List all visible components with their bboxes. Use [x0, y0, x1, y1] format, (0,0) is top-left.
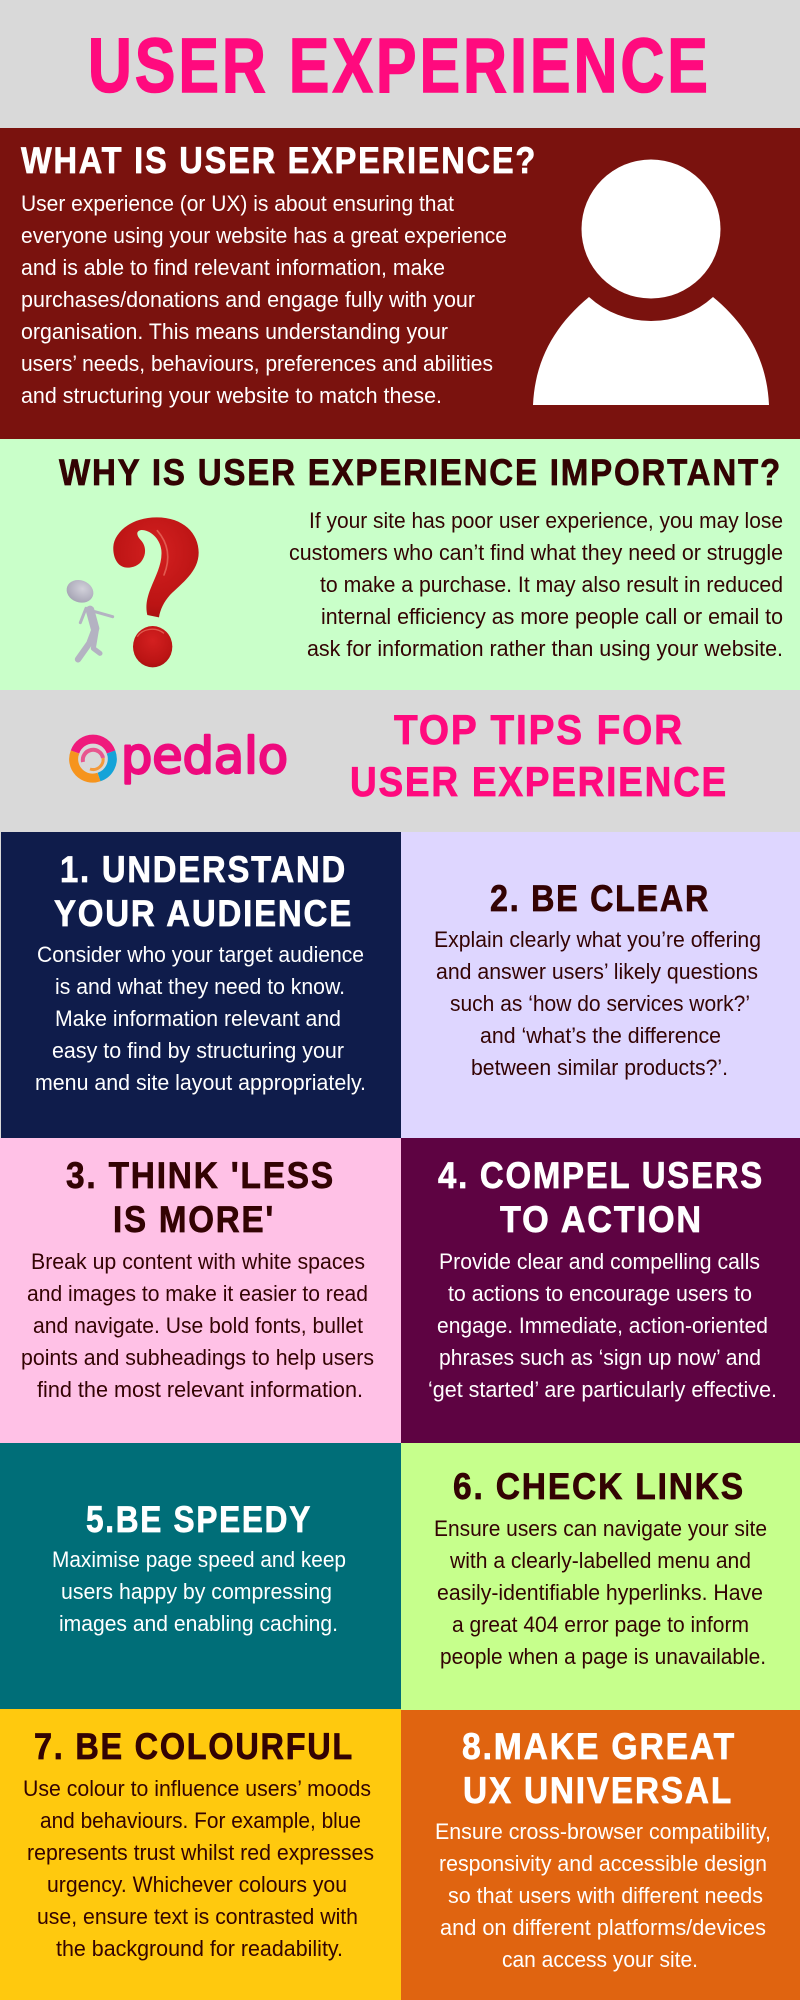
text block: tip 5: users happy by compressing: [61, 1579, 332, 1604]
text block: tip 3: and navigate. Use bold fonts, bullet: [33, 1313, 363, 1338]
text block: definition: purchases/donations and engage fully with your: [21, 287, 475, 312]
panel: tip 2 be clear: [401, 832, 800, 1138]
text block: tip 7: use, ensure text is contrasted with: [37, 1904, 358, 1929]
text block: tip 6: with a clearly-labelled menu and: [449, 1548, 751, 1573]
text block: why it matters: customers who can’t find what they need or struggle: [289, 540, 783, 565]
text block: tip 1: menu and site layout appropriately.: [35, 1070, 366, 1095]
heading: tip 3: 3. THINK 'LESS: [66, 1155, 335, 1196]
text block: tip 2: and answer users’ likely questions: [436, 959, 758, 984]
text block: tip 4: to actions to encourage users to: [448, 1281, 752, 1306]
panel: tip 6 check links: [401, 1443, 800, 1710]
heading: tip 2: 2. BE CLEAR: [490, 878, 710, 919]
text block: tip 4: phrases such as ‘sign up now’ and: [439, 1345, 761, 1370]
text block: tip 8: [435, 1819, 771, 1972]
text block: tip 2: between similar products?’.: [471, 1055, 728, 1080]
text block: tip 8: so that users with different needs: [448, 1883, 763, 1908]
heading: tip 3: IS MORE': [113, 1199, 275, 1240]
heading: tip 8: 8.MAKE GREAT: [462, 1726, 736, 1767]
text block: tip 8: responsivity and accessible design: [439, 1851, 767, 1876]
heading: top tips for user experience: USER EXPERIENCE: [350, 758, 728, 805]
text block: why it matters: [289, 508, 783, 661]
text block: definition: and is able to find relevant information, make: [21, 255, 445, 280]
text block: tip 6: a great 404 error page to inform: [452, 1612, 749, 1637]
text block: tip 6: people when a page is unavailable.: [440, 1644, 766, 1669]
heading: tip 4: TO ACTION: [500, 1199, 703, 1240]
text block: tip 1: easy to find by structuring your: [52, 1038, 344, 1063]
text block: why it matters: If your site has poor user experience, you may lose: [309, 508, 783, 533]
text block: tip 2: Explain clearly what you’re offering: [434, 927, 761, 952]
logo wordmark: pedalo: [121, 727, 288, 785]
heading: tip 8: UX UNIVERSAL: [463, 1770, 733, 1811]
panel: tip 1 understand your audience: [1, 832, 401, 1138]
text block: tip 3: and images to make it easier to read: [27, 1281, 368, 1306]
text block: definition: everyone using your website has a great experience: [21, 223, 507, 248]
panel: top tips banner: [0, 690, 800, 832]
panel: tip 3 think less is more: [0, 1138, 401, 1443]
text block: tip 4: ‘get started’ are particularly effective.: [428, 1377, 777, 1402]
heading: tip 8: [462, 1726, 736, 1811]
text block: definition: User experience (or UX) is about ensuring that: [21, 191, 454, 216]
text block: tip 8: and on different platforms/devices: [440, 1915, 766, 1940]
text block: tip 6: easily-identifiable hyperlinks. Have: [437, 1580, 763, 1605]
text block: tip 8: Ensure cross-browser compatibility,: [435, 1819, 771, 1844]
text block: tip 5: [52, 1547, 346, 1636]
panel: why is user experience important: [0, 439, 800, 690]
text block: tip 1: [35, 942, 366, 1095]
text block: tip 7: [23, 1776, 374, 1961]
text block: tip 3: [21, 1249, 374, 1402]
heading: tip 4: [438, 1155, 764, 1240]
panel: what is user experience: [0, 128, 800, 439]
text block: tip 7: Use colour to influence users’ moods: [23, 1776, 371, 1801]
heading: tip 3: [66, 1155, 335, 1240]
panel: tip 7 be colourful: [0, 1709, 401, 2000]
text block: why it matters: ask for information rather than using your website.: [307, 636, 783, 661]
text block: tip 5: images and enabling caching.: [59, 1611, 338, 1636]
text block: tip 7: and behaviours. For example, blue: [40, 1808, 361, 1833]
text block: tip 6: [434, 1516, 767, 1669]
text block: tip 2: [434, 927, 761, 1080]
text block: tip 1: Consider who your target audience: [37, 942, 364, 967]
text block: tip 4: [428, 1249, 777, 1402]
panel: tip 4 compel users to action: [401, 1138, 800, 1443]
heading: tip 5: 5.BE SPEEDY: [86, 1499, 312, 1540]
icon: question mark and figure: [63, 517, 199, 667]
text block: tip 8: can access your site.: [502, 1947, 698, 1972]
text block: tip 1: Make information relevant and: [55, 1006, 341, 1031]
heading: tip 1: [54, 849, 353, 934]
text block: definition: [21, 191, 507, 408]
text block: tip 4: Provide clear and compelling calls: [439, 1249, 760, 1274]
text block: tip 4: engage. Immediate, action-oriented: [437, 1313, 768, 1338]
text block: tip 2: and ‘what’s the difference: [480, 1023, 721, 1048]
heading: what is user experience: WHAT IS USER EXPERIENCE?: [21, 140, 537, 181]
heading: tip 4: 4. COMPEL USERS: [438, 1155, 764, 1196]
text block: tip 7: the background for readability.: [56, 1936, 343, 1961]
heading: top tips for user experience: TOP TIPS FOR: [394, 706, 684, 753]
text block: definition: organisation. This means understanding your: [21, 319, 448, 344]
text block: tip 7: urgency. Whichever colours you: [47, 1872, 347, 1897]
text block: tip 6: Ensure users can navigate your site: [434, 1516, 767, 1541]
text block: tip 3: find the most relevant information.: [37, 1377, 363, 1402]
panel: tip 8 make great ux universal: [401, 1710, 800, 2000]
icon: user silhouette: [533, 160, 769, 405]
text block: why it matters: to make a purchase. It may also result in reduced: [320, 572, 783, 597]
title banner: [0, 0, 800, 128]
text block: tip 5: Maximise page speed and keep: [52, 1547, 346, 1572]
text block: tip 1: is and what they need to know.: [55, 974, 345, 999]
heading: tip 7: 7. BE COLOURFUL: [34, 1726, 354, 1767]
logo: pedalo: [74, 727, 288, 785]
icon: pedalo swirl: [74, 739, 112, 778]
text block: tip 2: such as ‘how do services work?’: [450, 991, 750, 1016]
text block: tip 3: points and subheadings to help users: [21, 1345, 374, 1370]
heading: top tips for user experience: [350, 706, 728, 805]
text block: definition: and structuring your website to match these.: [21, 383, 442, 408]
text block: tip 3: Break up content with white spaces: [31, 1249, 365, 1274]
heading: tip 1: YOUR AUDIENCE: [54, 893, 353, 934]
text block: tip 7: represents trust whilst red expresses: [27, 1840, 374, 1865]
heading: tip 1: 1. UNDERSTAND: [60, 849, 347, 890]
text block: definition: users’ needs, behaviours, preferences and abilities: [21, 351, 493, 376]
panel: tip 5 be speedy: [0, 1443, 401, 1709]
heading: tip 6: 6. CHECK LINKS: [453, 1466, 745, 1507]
text block: why it matters: internal efficiency as more people call or email to: [321, 604, 783, 629]
